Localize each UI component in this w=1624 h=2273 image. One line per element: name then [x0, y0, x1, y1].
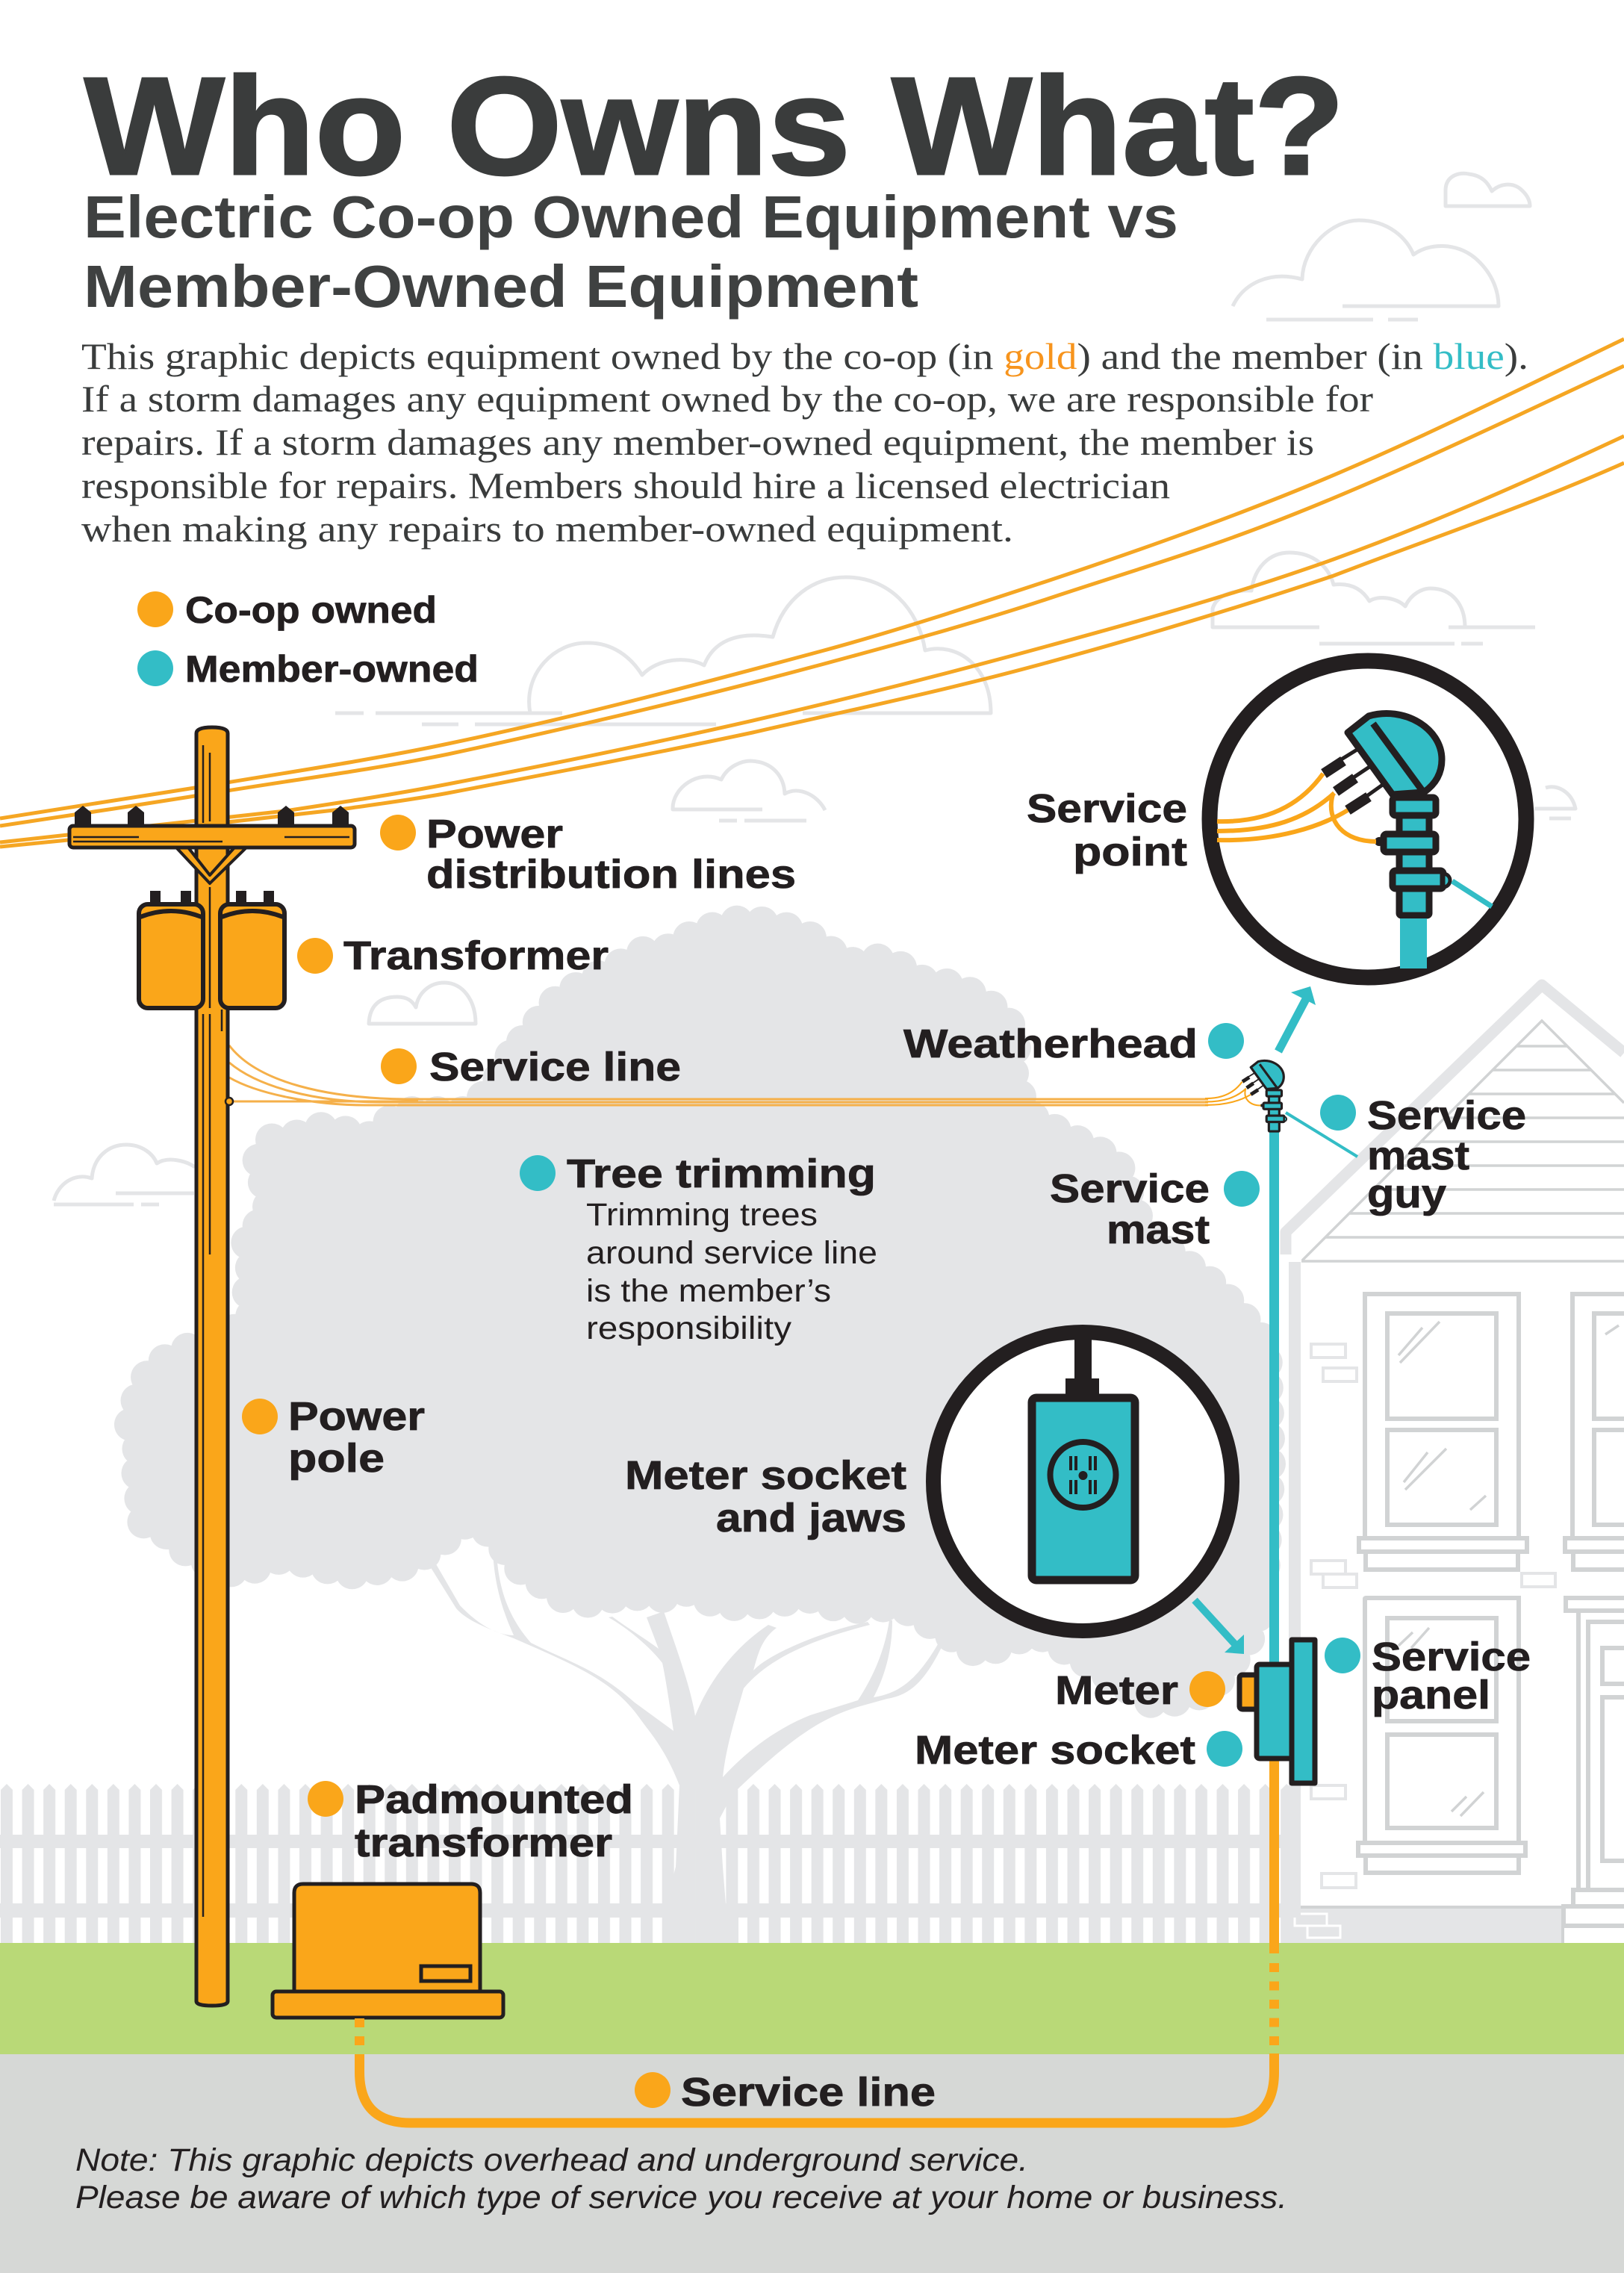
- arrow to service point detail: [1278, 986, 1316, 1051]
- label: power pole: pole: [288, 1436, 385, 1481]
- house: upper right window: [1565, 1294, 1624, 1570]
- label: service line overhead: Service line: [429, 1045, 681, 1089]
- label: tree trimming: Tree trimming: [567, 1151, 876, 1196]
- service mast guy wire: [1286, 1113, 1357, 1157]
- label: meter socket: Meter socket: [915, 1728, 1195, 1773]
- label: padmounted transformer: transformer: [355, 1820, 612, 1865]
- underground service line: [360, 1755, 1274, 2123]
- underground band: [0, 2054, 1624, 2273]
- label: tree trimming: Trimming trees: [586, 1197, 818, 1233]
- label: power distribution lines: [380, 812, 796, 897]
- label: meter socket and jaws: and jaws: [716, 1496, 906, 1540]
- label: weatherhead: Weatherhead: [903, 1022, 1198, 1066]
- label: service point: [1027, 786, 1187, 874]
- legend: Member-owned: [185, 648, 479, 690]
- tree: canopy: [130, 921, 1269, 1705]
- meter socket: [1257, 1664, 1294, 1759]
- label: padmounted transformer: [308, 1777, 633, 1865]
- legend: Co-op owned: [185, 589, 437, 631]
- tree: [130, 921, 1269, 1944]
- intro text: repairs. If a storm damages any member-owned equipment, the member is: [81, 421, 1314, 463]
- house: gable siding: [1301, 1021, 1624, 1261]
- label: meter: Meter: [1055, 1668, 1178, 1713]
- padmounted transformer: [273, 1884, 503, 2018]
- label: tree trimming: [520, 1151, 877, 1346]
- service point detail circle: [1210, 661, 1526, 977]
- label: service mast: mast: [1107, 1207, 1210, 1252]
- house: foundation: [1287, 1907, 1563, 1944]
- house: roof: [1286, 985, 1624, 1254]
- small weatherhead: [1205, 1060, 1287, 1131]
- label: service mast guy: guy: [1367, 1172, 1446, 1216]
- intro text: This graphic depicts equipment owned by the co-op (in gold) and the member (in blue).: [81, 335, 1528, 377]
- label: service mast guy: mast: [1367, 1134, 1469, 1178]
- label: service panel: panel: [1372, 1673, 1490, 1717]
- label: power pole: Power: [288, 1394, 425, 1439]
- label: tree trimming: responsibility: [586, 1310, 792, 1346]
- weatherhead enlarged: [1217, 714, 1450, 915]
- picket fence: [0, 1784, 1301, 1944]
- label: tree trimming: around service line: [586, 1235, 877, 1271]
- subtitle: Member-Owned Equipment: [84, 253, 918, 320]
- label: service line underground: Service line: [681, 2070, 936, 2115]
- intro text: when making any repairs to member-owned equipment.: [81, 508, 1013, 550]
- house: wall edge: [1289, 1262, 1301, 1944]
- meter: [1239, 1675, 1257, 1709]
- label: service mast guy: Service: [1367, 1093, 1526, 1138]
- meter socket detail circle: [933, 1332, 1232, 1631]
- label: padmounted transformer: Padmounted: [355, 1777, 633, 1822]
- intro text: responsible for repairs. Members should hire a licensed electrician: [81, 464, 1170, 506]
- overhead service line: [229, 1045, 1208, 1105]
- label: meter socket and jaws: [625, 1453, 906, 1540]
- note: Note: This graphic depicts overhead and underground service.: [75, 2142, 1028, 2178]
- label: service mast: Service: [1050, 1166, 1210, 1211]
- house: [1286, 985, 1624, 1944]
- house: lower left window: [1358, 1598, 1525, 1873]
- label: meter socket and jaws: Meter socket: [625, 1453, 906, 1498]
- grass: [0, 1943, 1624, 2054]
- service line clamp: [225, 1098, 233, 1105]
- background clouds: [54, 173, 1575, 1204]
- tree: trunk and branches: [428, 1551, 944, 1944]
- label: tree trimming: is the member’s: [586, 1273, 831, 1309]
- crossarm brace: [176, 848, 246, 883]
- socket box: [1032, 1398, 1135, 1580]
- label: power distribution lines: Power: [426, 812, 563, 856]
- crossarm: [69, 826, 355, 848]
- note: Please be aware of which type of service you receive at your home or business.: [75, 2180, 1287, 2216]
- arrow to meter: [1195, 1600, 1244, 1654]
- intro text: If a storm damages any equipment owned by the co-op, we are responsible for: [81, 378, 1373, 420]
- label: service mast guy: [1320, 1093, 1526, 1216]
- label: service point: point: [1073, 830, 1187, 874]
- subtitle: [84, 184, 1178, 320]
- note: [75, 2142, 1287, 2216]
- pole shaft: [196, 727, 228, 2006]
- service mast: [1269, 1120, 1279, 1665]
- legend: [137, 589, 479, 690]
- label: meter: [1055, 1668, 1225, 1713]
- house: bricks: [1295, 1344, 1555, 1938]
- house: door and steps: [1555, 1598, 1624, 1942]
- label: service point: Service: [1027, 786, 1187, 831]
- socket conduit: [1065, 1337, 1099, 1394]
- label: service mast: [1050, 1166, 1260, 1252]
- label: service panel: [1325, 1635, 1531, 1717]
- label: power distribution lines: distribution lines: [426, 852, 796, 897]
- label: power pole: [242, 1394, 425, 1481]
- power pole: [69, 727, 355, 2006]
- socket jaws dial: [1050, 1442, 1116, 1508]
- service panel: [1292, 1640, 1315, 1783]
- enlarged guy wire: [1452, 881, 1492, 907]
- insulators: [75, 806, 349, 824]
- title: Who Owns What?: [84, 49, 1345, 204]
- intro text: [81, 335, 1528, 550]
- pole-mounted transformers: [139, 892, 284, 1008]
- power distribution lines: [0, 339, 1624, 847]
- pole grain lines: [203, 745, 222, 1917]
- enlarged mast: [1400, 918, 1427, 968]
- label: transformer: Transformer: [343, 933, 609, 978]
- label: service panel: Service: [1372, 1635, 1531, 1679]
- subtitle: Electric Co-op Owned Equipment vs: [84, 184, 1178, 250]
- house: upper left window: [1359, 1294, 1527, 1570]
